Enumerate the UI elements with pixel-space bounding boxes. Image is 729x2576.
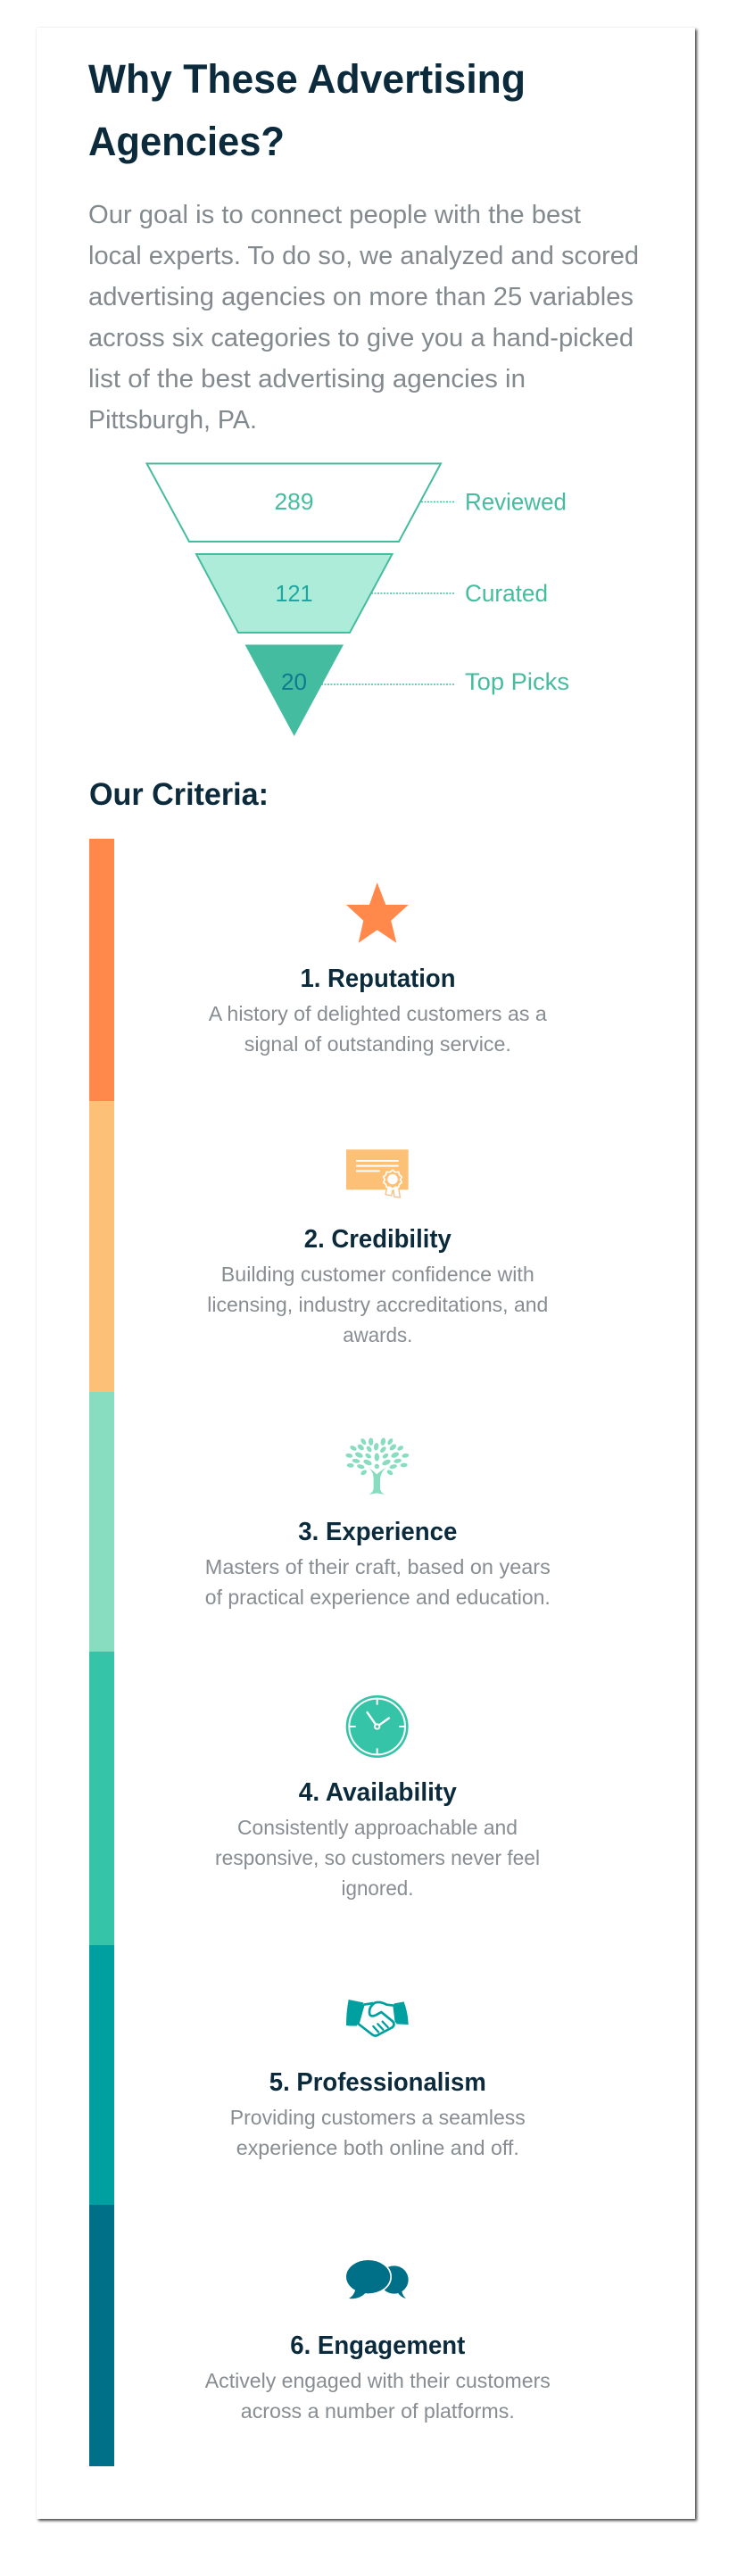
intro paragraph: Pittsburgh, PA. <box>88 406 257 435</box>
description <box>209 1002 547 1056</box>
heading: our criteria: Our Criteria: <box>89 777 269 812</box>
heading: 3. Experience <box>298 1518 457 1546</box>
funnel tier: reviewed: 289 <box>275 488 314 515</box>
criterion 2: credibility <box>207 1149 548 1346</box>
colour bar <box>89 839 114 2466</box>
funnel tier: top picks: 20 <box>281 668 307 695</box>
funnel tier: top picks <box>244 644 569 736</box>
description <box>230 2106 526 2159</box>
icon: handshake <box>346 2000 409 2036</box>
heading: 6. Engagement <box>290 2332 466 2360</box>
heading: 1. Reputation <box>300 965 455 993</box>
description: of practical experience and education. <box>205 1586 551 1609</box>
intro paragraph: advertising agencies on more than 25 variables <box>88 283 634 311</box>
description: A history of delighted customers as a <box>209 1002 547 1025</box>
criterion 3: experience <box>205 1437 551 1609</box>
intro paragraph <box>88 201 639 435</box>
description: Consistently approachable and <box>237 1816 518 1839</box>
description: signal of outstanding service. <box>244 1032 511 1056</box>
funnel tier: reviewed <box>146 464 567 542</box>
description: Providing customers a seamless <box>230 2106 526 2129</box>
heading: 4. Availability <box>299 1778 457 1807</box>
funnel tier: top picks: Top Picks <box>465 668 569 695</box>
icon: clock <box>346 1695 409 1758</box>
description: Building customer confidence with <box>221 1263 534 1286</box>
intro paragraph: list of the best advertising agencies in <box>88 365 526 393</box>
criterion 1: reputation <box>209 882 547 1056</box>
description <box>207 1263 548 1346</box>
funnel tier: reviewed: Reviewed <box>465 489 567 516</box>
funnel tier: curated: Curated <box>465 580 548 607</box>
description: experience both online and off. <box>236 2136 519 2159</box>
icon: tree <box>345 1437 410 1495</box>
funnel chart <box>146 464 569 736</box>
description: responsive, so customers never feel <box>215 1846 540 1869</box>
description: licensing, industry accreditations, and <box>207 1293 548 1316</box>
description <box>215 1816 540 1900</box>
heading: 2. Credibility <box>304 1225 451 1254</box>
title: Why These Advertising <box>88 56 526 102</box>
description <box>205 2369 551 2423</box>
description: Actively engaged with their customers <box>205 2369 551 2392</box>
title: Agencies? <box>88 119 285 164</box>
funnel tier: curated: 121 <box>275 580 312 607</box>
description: across a number of platforms. <box>241 2399 515 2423</box>
criterion 6: engagement <box>205 2260 551 2423</box>
funnel tier: curated <box>196 554 548 633</box>
criterion 5: professionalism <box>230 2000 526 2159</box>
icon: star <box>346 882 409 943</box>
heading: 5. Professionalism <box>269 2068 486 2097</box>
description <box>205 1555 551 1609</box>
intro paragraph: local experts. To do so, we analyzed and scored <box>88 242 639 270</box>
icon: speech bubbles <box>346 2260 409 2299</box>
criterion 4: availability <box>215 1695 540 1900</box>
intro paragraph: Our goal is to connect people with the best <box>88 201 581 229</box>
description: awards. <box>343 1323 412 1346</box>
description: Masters of their craft, based on years <box>205 1555 551 1578</box>
description: ignored. <box>341 1876 414 1900</box>
icon: certificate <box>346 1149 409 1197</box>
title <box>88 56 526 164</box>
intro paragraph: across six categories to give you a hand-picked <box>88 324 634 352</box>
